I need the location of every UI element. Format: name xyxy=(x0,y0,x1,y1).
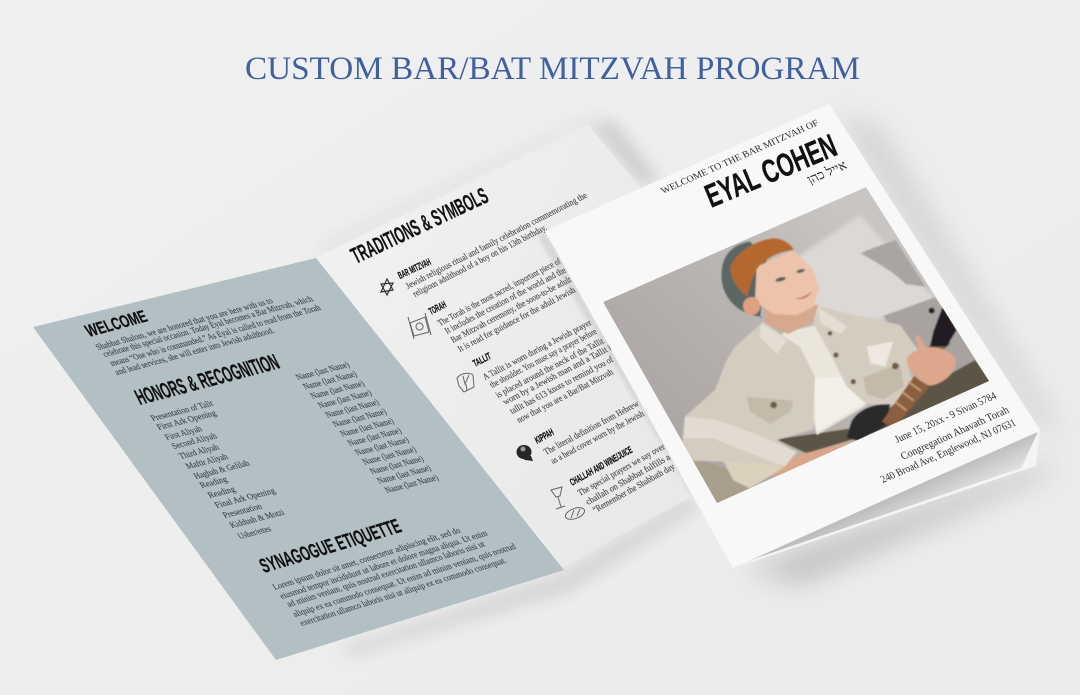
list: honors: Second Aliyah xyxy=(170,432,219,451)
date and venue: 240 Broad Ave, Englewood, NJ 07631 xyxy=(878,417,1018,486)
list: names: Name (last Name) xyxy=(353,435,411,458)
item: challah and wine: challah on Shabbat fulfills a xyxy=(584,452,672,507)
item: bar mitzvah: religious adulthood of a boy on his 13th birthday. xyxy=(411,223,549,299)
list: honors: First Ark Opening xyxy=(155,409,219,432)
neck xyxy=(765,305,818,334)
forearm xyxy=(770,440,867,477)
list: honors: Presentation of Talit xyxy=(149,399,216,423)
item: bar mitzvah xyxy=(381,190,589,299)
list: names: Name (last Name) xyxy=(375,463,433,486)
list: names: Name (last Name) xyxy=(338,416,396,439)
list: names: Name (last Name) xyxy=(345,426,404,448)
item: tallit xyxy=(457,318,616,425)
item: bar mitzvah: BAR MITZVAH xyxy=(396,257,433,282)
item: tallit: tallit has 613 knots to remind you of xyxy=(508,354,616,416)
list: names: Name (last Name) xyxy=(360,445,419,467)
hand xyxy=(907,335,956,386)
ukulele xyxy=(847,404,890,441)
list: names: Name (last Name) xyxy=(368,454,426,477)
list: names: Name (last Name) xyxy=(323,397,382,420)
heading: synagogue etiquette: SYNAGOGUE ETIQUETTE xyxy=(256,515,405,577)
pockets and collar xyxy=(747,397,793,424)
item: tallit: the shoulder. You must say a prayer before xyxy=(488,326,599,390)
name: EYAL COHEN xyxy=(700,127,842,214)
jacket buttons xyxy=(770,331,899,408)
panel: blue left page xyxy=(33,258,564,660)
item: kippah xyxy=(516,398,646,466)
list: honors xyxy=(149,399,287,541)
item: challah and wine: “Remember the Shabbath day xyxy=(591,461,677,515)
eyes and mouth xyxy=(775,276,786,283)
t-shirt xyxy=(782,323,867,435)
etiquette text: aliquip ex ea commodo consequat. Ut enim ad minim veniam, quis nostrud xyxy=(291,542,518,619)
heading: honors and recognition: HONORS & RECOGNITION xyxy=(131,349,283,409)
item: torah: The Torah is the most sacred, important piece of xyxy=(436,256,563,328)
item: torah: TORAH xyxy=(427,300,448,318)
date and venue: Congregation Ahavath Torah xyxy=(898,404,1012,463)
item: tallit: TALLIT xyxy=(471,351,493,370)
face xyxy=(755,250,819,315)
heading: welcome: WELCOME xyxy=(82,307,151,341)
heading: traditions and symbols: TRADITIONS & SYMBOLS xyxy=(347,182,492,268)
inner page: traditions and symbols xyxy=(316,125,700,566)
shadow of the cover on the inner page xyxy=(537,231,700,505)
list: honors: Final Ark Opening xyxy=(213,487,278,510)
jacket body and sleeve xyxy=(682,322,815,488)
wall light xyxy=(790,215,935,320)
list: names: Name (last Name) xyxy=(331,407,389,429)
item: kippah: as a head cover worn by the Jewish xyxy=(549,408,646,466)
etiquette text: ad minim veniam, quis nostrud exercitation ullamco laboris nisi ut xyxy=(285,540,488,609)
beanie xyxy=(722,242,767,318)
trousers xyxy=(777,360,992,453)
welcome text: means “One who is commanded.” As Eyal is called to read from the Torah xyxy=(108,303,323,368)
list: names: Name (last Name) xyxy=(383,473,441,495)
item: torah: It is read for guidance for the adult Jewish xyxy=(456,285,578,354)
list: honors: Maftir Aliyah xyxy=(184,452,231,471)
list: names xyxy=(294,360,441,495)
icon: tallit xyxy=(457,373,474,392)
cover welcome line: WELCOME TO THE BAR MITZVAH OF xyxy=(659,119,821,197)
item: tallit: now that you are a Bar/Bat Mitzvah xyxy=(515,367,615,425)
icon: challah bread xyxy=(564,505,586,522)
item: challah and wine xyxy=(551,442,677,522)
welcome text: Shabbat Shalom, we are honored that you are here with us to xyxy=(94,297,276,352)
list: honors: Kiddush & Motzi xyxy=(228,508,287,530)
title: CUSTOM BAR/BAT MITZVAH PROGRAM xyxy=(245,51,860,87)
icon: kiddush cup xyxy=(551,487,565,509)
item: challah and wine: The special prayers we say over xyxy=(576,442,667,498)
welcome text xyxy=(94,295,323,377)
list: honors: Reading xyxy=(206,485,238,500)
item: tallit: worn by a Jewish man and a Tallit is xyxy=(501,341,616,407)
list: names: Name (last Name) xyxy=(308,379,367,401)
icon: star of david xyxy=(381,279,393,295)
wall shadow shapes xyxy=(861,240,926,287)
item: bar mitzvah: Jewish religious ritual and family celebration commemorating the xyxy=(404,190,589,291)
item: torah: It includes the creation of the world and the xyxy=(443,265,568,336)
item: challah and wine: CHALLAH AND WINE/JUICE xyxy=(568,445,635,489)
item: kippah: KIPPAH xyxy=(533,427,556,447)
photo: boy with ukulele xyxy=(603,187,992,507)
item: torah xyxy=(408,256,578,354)
welcome text: celebrate this special occasion. Today Eyal becomes a Bar Mitzvah, which xyxy=(101,295,315,359)
item: tallit: is placed around the neck of the Tallit xyxy=(494,336,606,400)
item: tallit: A Tallit is worn during a Jewish prayer xyxy=(481,318,593,382)
hair xyxy=(730,238,794,297)
item: torah: Bar Mitzvah ceremony, the soon-to-be adult xyxy=(449,274,573,345)
list: honors: First Aliyah xyxy=(163,425,205,442)
panel: front cover xyxy=(545,104,1040,568)
list: honors: Haghah & Gelilah xyxy=(192,459,252,481)
welcome text: and lead services, she will enter into Jewish adulthood. xyxy=(113,327,277,377)
list: names: Name (last Name) xyxy=(301,369,359,392)
etiquette text: Lorem ipsum dolor sit amet, consectetur adipiscing elit, sed do xyxy=(271,526,463,592)
hebrew name: אייל כהן xyxy=(804,158,850,187)
etiquette text: eiusmod tempor incididunt ut labore et dolore magna aliqua. Ut enim xyxy=(278,529,491,601)
item: kippah: The literal definition from Hebrew xyxy=(542,398,641,457)
list: honors: Third Aliyah xyxy=(177,443,222,461)
etiquette text: exercitation ullamco laboris nisi ut aliquip ex ea commodo consequat. xyxy=(298,557,509,628)
folded back sheet xyxy=(733,430,1040,567)
list: honors: Reading xyxy=(198,475,230,490)
list: honors: Usher/ettes xyxy=(236,525,274,541)
list: names: Name (last Name) xyxy=(294,360,352,382)
icon: torah scroll xyxy=(408,313,431,339)
shadows under the open program xyxy=(316,110,1060,656)
list: honors: Presentation xyxy=(221,502,265,520)
icon: kippah xyxy=(516,445,533,461)
date and venue: June 15, 20xx - 9 Sivan 5784 xyxy=(892,390,999,446)
list: names: Name (last Name) xyxy=(316,388,374,411)
blanket xyxy=(690,457,760,507)
